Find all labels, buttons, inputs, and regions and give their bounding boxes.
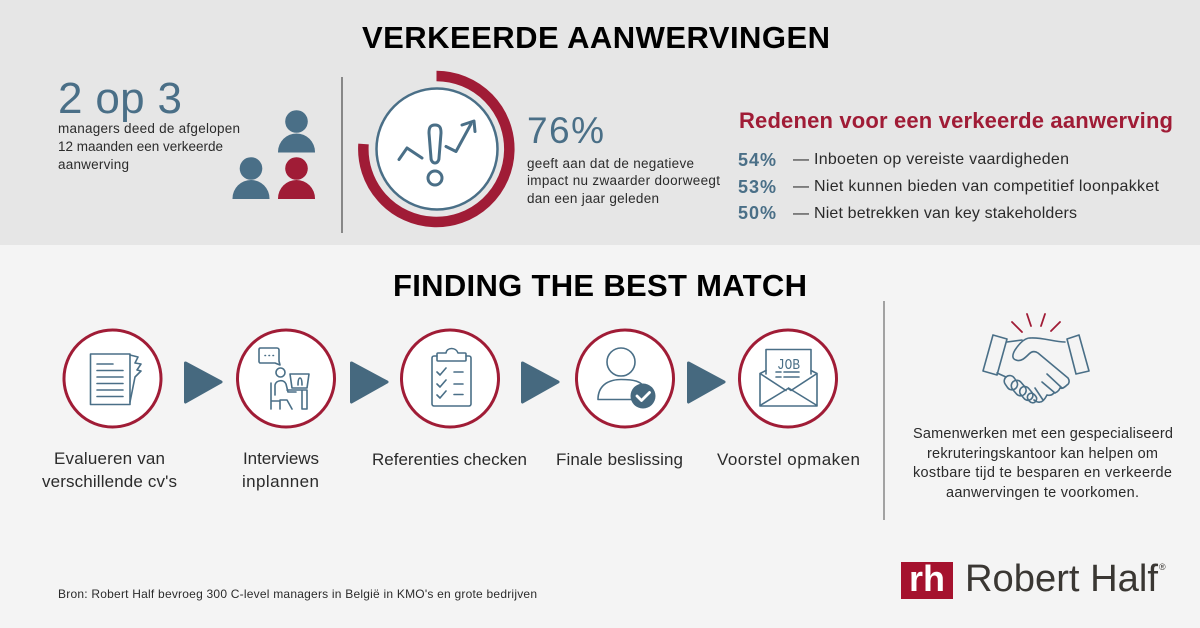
stat: 2 op 3: 12 maanden een verkeerde [58,139,223,154]
icon: exclamation with trend [399,121,475,185]
reason 1 [738,150,1069,170]
reason 1: 54% [738,150,776,170]
title: verkeerde aanwervingen: VERKEERDE AANWERVINGEN [362,20,830,55]
stat: 2 op 3: managers deed de afgelopen [58,121,240,136]
reason 3 [738,203,1077,223]
step 4 icon: person check [576,330,674,427]
text: samenwerken: aanwervingen te voorkomen. [946,485,1139,501]
logo: robert half: Robert Half [965,558,1158,600]
logo: robert half: ® [1159,562,1166,572]
step labels: Finale beslissing [556,450,683,469]
logo: robert half: rh [909,558,945,599]
stat: 2 op 3: 2 op 3 [58,74,182,123]
reason 2 [738,177,1160,197]
heading: redenen: Redenen voor een verkeerde aanwerving [739,108,1173,133]
step 2 icon: interview [238,330,334,427]
reason 1: — [793,151,809,168]
step 3 icon: clipboard [402,330,498,427]
text: samenwerken: kostbare tijd te besparen en verkeerde [913,465,1172,481]
icon: handshake [983,314,1089,404]
heading: finding the best match: FINDING THE BEST MATCH [393,268,807,303]
step labels: verschillende cv's [42,472,177,491]
text: samenwerken: Samenwerken met een gespecialiseerd [913,426,1173,442]
panel: redenen [738,108,1173,223]
step labels: Evalueren van [54,449,165,468]
reason 3: Niet betrekken van key stakeholders [814,205,1077,222]
stat: 76% [527,110,720,206]
step labels: Referenties checken [372,450,527,469]
stat: 76%: impact nu zwaarder doorweegt [527,173,720,188]
reason 1: Inboeten op vereiste vaardigheden [814,151,1069,168]
arrow 3 [522,363,558,402]
step labels: Voorstel opmaken [717,450,860,469]
text: samenwerken [913,426,1173,501]
step 5 icon: job envelope: JOB [777,357,800,374]
reason 2: 53% [738,177,776,197]
text: samenwerken: rekruteringskantoor kan helpen om [927,446,1158,462]
step labels: inplannen [242,472,319,491]
source note: Bron: Robert Half bevroeg 300 C-level managers in België in KMO's en grote bedrijven [58,587,537,601]
stat: 2 op 3: aanwerving [58,157,129,172]
step labels [42,449,860,491]
icon: three people [232,110,315,199]
stat: 76%: 76% [527,110,604,151]
stat: 76%: geeft aan dat de negatieve [527,156,694,171]
reason 3: — [793,205,809,222]
step labels: Interviews [243,449,319,468]
arrow 2 [352,363,387,402]
step 1 icon: documents [64,330,161,427]
ring chart: 76% [363,76,509,222]
reason 2: — [793,178,809,195]
reason 3: 50% [738,203,776,223]
stat: 76%: dan een jaar geleden [527,191,659,206]
reason 2: Niet kunnen bieden van competitief loonpakket [814,178,1160,195]
step 5 icon: job envelope [740,330,836,427]
stat: 2 op 3 [58,74,240,172]
arrow 4 [688,363,724,402]
arrow 1 [186,363,221,402]
